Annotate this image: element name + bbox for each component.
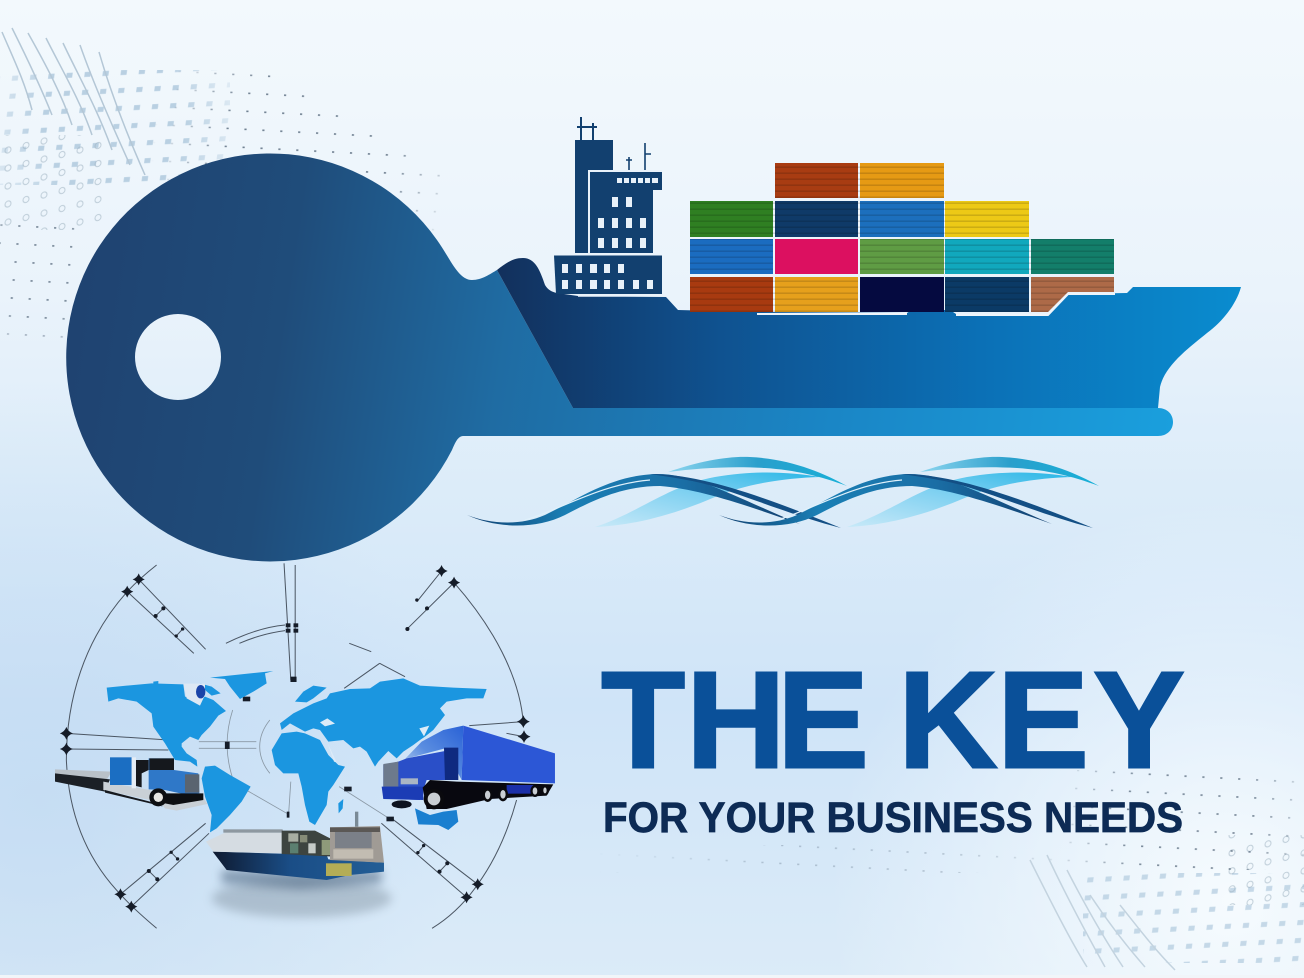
Madagascar [338, 799, 343, 813]
Black Sea gap [320, 718, 429, 762]
cargo ship [206, 812, 384, 880]
Greenland [210, 671, 273, 699]
ship hull [497, 258, 1241, 408]
chassis [423, 780, 553, 809]
row 3 [690, 239, 1114, 274]
windows [562, 178, 658, 289]
grille [383, 762, 398, 787]
yellow hull mark [326, 863, 352, 876]
Arctic islands [153, 681, 221, 696]
bumper [165, 793, 203, 805]
Africa [272, 732, 345, 825]
corrugation lines [690, 163, 1114, 312]
cargo [282, 831, 333, 857]
ship bridge [330, 826, 384, 863]
white topsides [206, 833, 283, 853]
key silhouette [66, 153, 1173, 561]
flatbed trailer [55, 769, 112, 783]
water waves [467, 457, 1099, 528]
Hudson Bay [183, 684, 205, 706]
front wheel [149, 788, 167, 806]
headline: THE KEY: THE KEY [601, 644, 1185, 798]
left truck [55, 757, 207, 811]
compass arcs and guide lines [66, 563, 524, 928]
row 1 [775, 163, 944, 198]
subheading: FOR YOUR BUSINESS NEEDS [603, 794, 1183, 842]
right truck [382, 726, 555, 809]
South America [202, 766, 251, 832]
bottom-right dot pattern [600, 770, 1304, 970]
under shadow [392, 800, 412, 808]
cab body [383, 751, 448, 800]
deck highlight [578, 295, 666, 297]
wheels [424, 785, 549, 809]
cab box [110, 757, 132, 785]
Australia [415, 808, 458, 830]
cab [149, 758, 199, 794]
top-left dot pattern [0, 28, 440, 350]
water reflection [212, 870, 392, 918]
deck rim [223, 829, 283, 833]
masts [577, 117, 651, 170]
trailer box [462, 726, 555, 783]
funnel tower [575, 140, 613, 253]
trailer shadow [105, 790, 163, 807]
windshield [444, 748, 458, 780]
Scandinavia [295, 686, 327, 702]
deck highlight strip [757, 294, 1115, 315]
grille [185, 774, 199, 793]
key with ship hull [66, 153, 1241, 561]
cab fairing [405, 726, 463, 780]
container stack [690, 163, 1114, 312]
compass stars [60, 565, 531, 913]
logistics globe illustration [55, 563, 555, 928]
bumper [382, 787, 423, 800]
row 2 [690, 201, 1029, 237]
ship hull [213, 852, 384, 880]
trailer body [103, 782, 207, 811]
ship mast [355, 812, 358, 827]
bridge block [588, 170, 662, 253]
ship superstructure [554, 117, 666, 296]
row 4 [690, 277, 1114, 312]
base block [554, 256, 662, 294]
North America [107, 683, 226, 767]
cab windows [136, 758, 174, 787]
world map [107, 671, 487, 832]
Eurasia [280, 678, 487, 767]
Hudson Bay dot [196, 685, 205, 698]
